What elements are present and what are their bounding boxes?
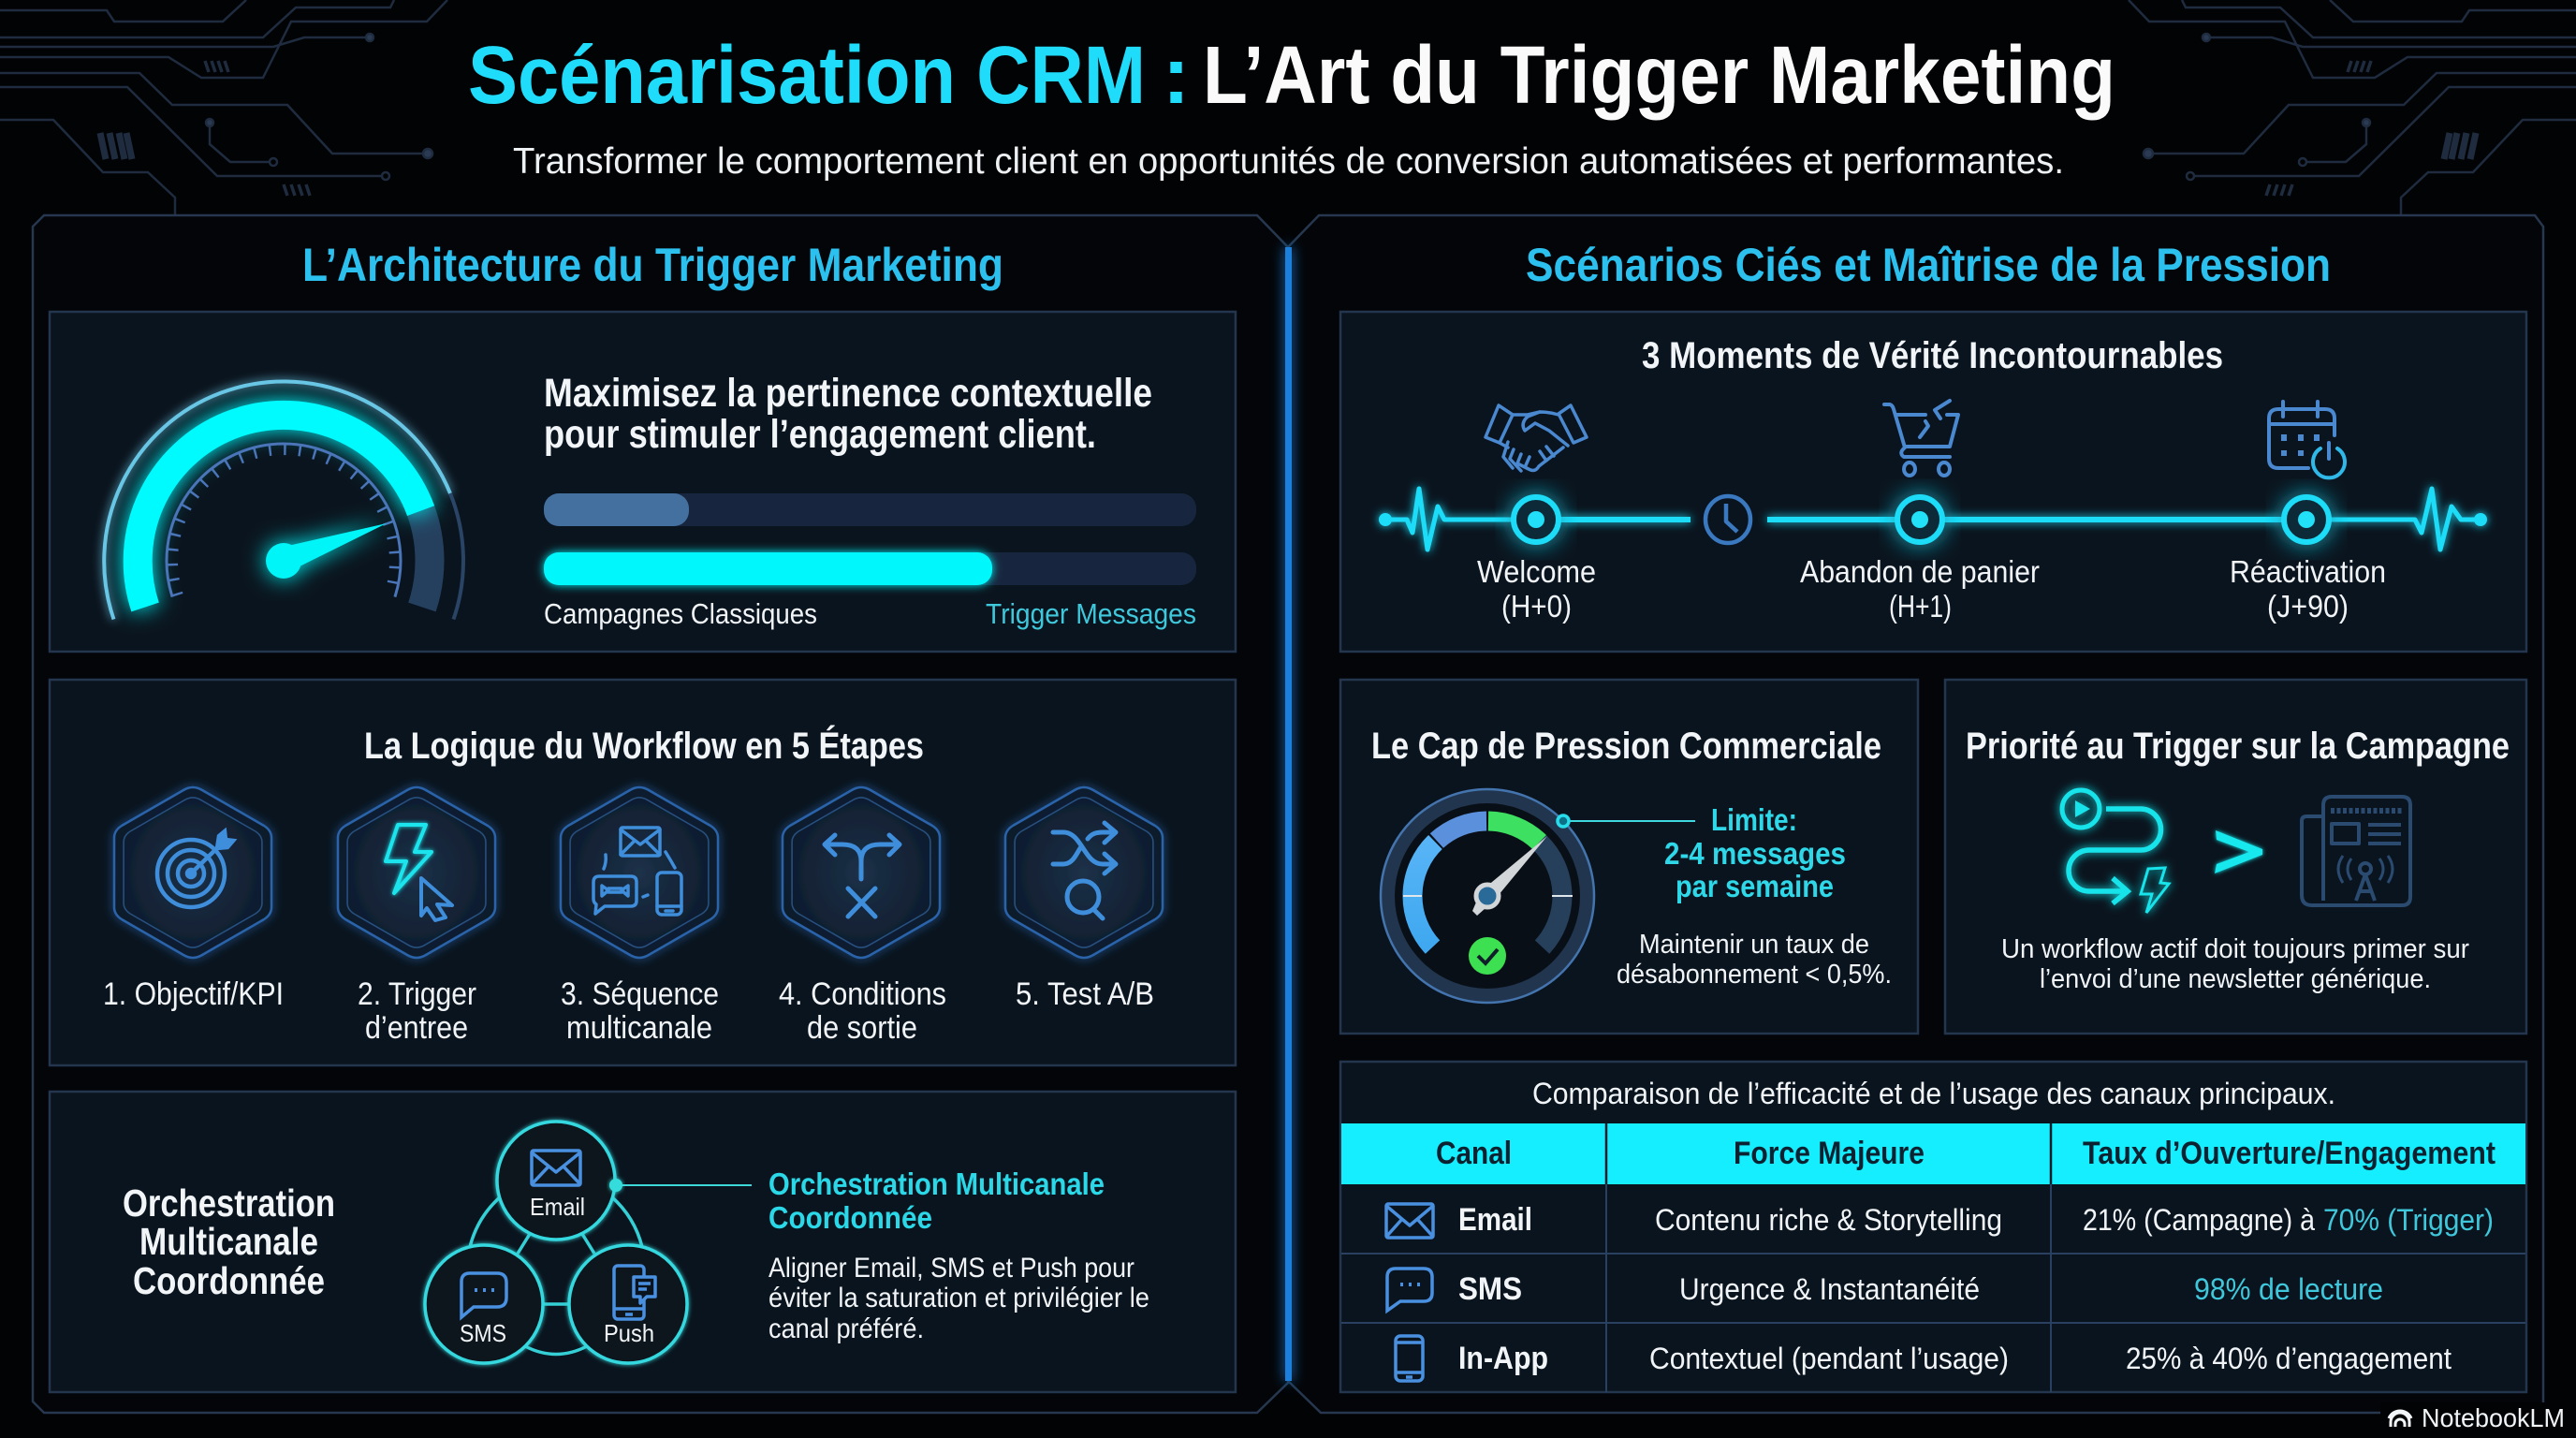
diagram: channels triad <box>425 1122 687 1363</box>
callout title: Orchestration Multicanale <box>768 1167 1105 1201</box>
arrow: greater than <box>2215 830 2262 873</box>
label: abandon de panier: Abandon de panier <box>1800 554 2040 589</box>
callout title: Coordonnée <box>768 1200 932 1235</box>
icon: envelope <box>1386 1204 1433 1238</box>
heading: left column: L’Architecture du Trigger Marketing <box>302 239 1003 291</box>
heading: right column: Scénarios Ciés et Maîtrise de la Pression <box>1526 239 2331 291</box>
label: reactivation: Réactivation <box>2230 554 2386 589</box>
bar label: trigger: Trigger Messages <box>986 597 1196 630</box>
chart: speed gauge <box>104 381 463 620</box>
bar: campagnes classiques <box>544 493 1196 526</box>
node: abandon <box>1897 497 1942 542</box>
title: L’Art du Trigger Marketing <box>1203 30 2115 121</box>
label: reactivation <box>2230 554 2386 624</box>
row: in-app: In-App <box>1458 1341 1548 1376</box>
callout title <box>768 1167 1105 1235</box>
icon: fork and cross <box>825 835 900 917</box>
step label 4: 4. Conditions <box>779 976 946 1012</box>
pressure note: désabonnement < 0,5%. <box>1617 960 1892 990</box>
panel: trigger priority <box>1945 680 2526 1034</box>
label: abandon de panier: (H+1) <box>1889 589 1952 624</box>
row: sms: Urgence & Instantanéité <box>1679 1272 1980 1306</box>
channel: email <box>497 1122 615 1240</box>
limit callout: 2-4 messages <box>1664 836 1846 871</box>
step 3: sequence <box>561 787 719 1046</box>
clock icon <box>1705 496 1750 543</box>
label: abandon de panier <box>1800 554 2040 624</box>
row: in-app <box>1396 1336 2452 1381</box>
priority note <box>2001 934 2469 994</box>
channel: push: Push <box>604 1319 654 1347</box>
row: sms <box>1387 1269 2383 1311</box>
channel: sms <box>425 1245 543 1363</box>
row: sms: 98% de lecture <box>2194 1272 2383 1306</box>
icon: workflow <box>2062 790 2169 913</box>
limit callout: Limite: <box>1711 802 1797 837</box>
connector line <box>609 1179 752 1192</box>
priority note: Un workflow actif doit toujours primer sur <box>2001 934 2469 964</box>
title: Scénarisation CRM <box>468 30 1146 121</box>
panel: relevance gauge and bars <box>50 312 1236 652</box>
orchestration title: Coordonnée <box>133 1259 325 1302</box>
circuit decoration right <box>2129 0 2576 215</box>
timeline <box>1379 489 2487 550</box>
panel: orchestration <box>50 1092 1236 1392</box>
bar label: classic: Campagnes Classiques <box>544 597 817 630</box>
row: email: 70% (Trigger) <box>2323 1203 2494 1237</box>
headline text: pour stimuler l’engagement client. <box>544 412 1096 457</box>
icon: target <box>157 831 233 907</box>
icon: channels <box>593 828 681 915</box>
pressure heading: Le Cap de Pression Commerciale <box>1371 726 1881 767</box>
pressure note: Maintenir un taux de <box>1639 930 1869 960</box>
step 2: trigger <box>338 787 495 1046</box>
label: welcome: (H+0) <box>1501 589 1572 624</box>
table header <box>1341 1123 2525 1184</box>
row: email: 21% (Campagne) à <box>2083 1203 2315 1237</box>
callout body: éviter la saturation et privilégier le <box>768 1283 1149 1313</box>
row: email <box>1386 1202 2494 1238</box>
icon: broken cart <box>1884 401 1958 476</box>
limit callout: par semaine <box>1676 869 1834 903</box>
subtitle: Transformer le comportement client en opportunités de conversion automatisées et performantes. <box>513 141 2064 182</box>
central divider bar <box>1285 247 1292 1381</box>
priority note: l’envoi d’une newsletter générique. <box>2040 964 2431 994</box>
notebooklm badge <box>2380 1402 2576 1438</box>
panel: right column frame <box>1288 215 2543 1413</box>
panel: 3 moments of truth <box>1340 312 2526 652</box>
orchestration title: Multicanale <box>139 1220 318 1263</box>
pressure note <box>1617 930 1892 990</box>
node: reactivation <box>2284 497 2329 542</box>
orchestration title: Orchestration <box>123 1181 335 1225</box>
panel: workflow in 5 steps <box>50 680 1236 1065</box>
title <box>468 30 2115 121</box>
step 4: exit conditions <box>779 787 946 1046</box>
title: : <box>1163 30 1190 121</box>
moments heading: 3 Moments de Vérité Incontournables <box>1642 335 2223 376</box>
icon: newspaper <box>2302 797 2410 905</box>
row: email: Contenu riche & Storytelling <box>1655 1203 2002 1237</box>
orchestration title <box>123 1181 335 1302</box>
icon: notebooklm logo <box>2389 1411 2411 1427</box>
icon: chat bubble <box>1387 1269 1432 1311</box>
channel: email: Email <box>530 1193 585 1221</box>
label: welcome: Welcome <box>1477 554 1596 589</box>
icon: calendar with power <box>2269 402 2345 477</box>
callout body: canal préféré. <box>768 1313 924 1344</box>
icon: shuffle and magnifier <box>1053 823 1116 918</box>
row: in-app: Contextuel (pendant l’usage) <box>1649 1342 2009 1375</box>
step label 4: de sortie <box>807 1010 917 1046</box>
headline text: Maximisez la pertinence contextuelle <box>544 371 1152 416</box>
panel: commercial pressure cap <box>1340 680 1918 1034</box>
step label 4 <box>779 976 946 1046</box>
panel: left column frame <box>33 215 1288 1413</box>
node: welcome <box>1514 497 1559 542</box>
table header: Canal <box>1436 1136 1512 1171</box>
channel: push <box>569 1245 687 1363</box>
step label 3: 3. Séquence <box>561 976 719 1012</box>
step 1: objectif <box>103 787 284 1012</box>
step 5: test A/B <box>1005 787 1163 1012</box>
channel: sms: SMS <box>460 1319 506 1347</box>
callout body <box>768 1253 1149 1344</box>
step label 3 <box>561 976 719 1046</box>
workflow heading: La Logique du Workflow en 5 Étapes <box>364 725 924 767</box>
step label 5: 5. Test A/B <box>1016 976 1154 1012</box>
notebooklm badge: NotebookLM <box>2422 1403 2565 1432</box>
icon: handshake <box>1486 405 1587 471</box>
label: welcome <box>1477 554 1596 624</box>
step label 2 <box>358 976 476 1046</box>
step label 3: multicanale <box>566 1010 712 1046</box>
limit callout <box>1664 802 1846 903</box>
circuit decoration left <box>0 0 447 215</box>
bar: trigger messages <box>544 552 1196 585</box>
step label 1: 1. Objectif/KPI <box>103 976 284 1012</box>
table caption: Comparaison de l’efficacité et de l’usage des canaux principaux. <box>1532 1077 2335 1110</box>
table header: Force Majeure <box>1734 1136 1925 1171</box>
callout body: Aligner Email, SMS et Push pour <box>768 1253 1134 1284</box>
icon: bolt and cursor <box>386 825 452 920</box>
row: sms: SMS <box>1458 1271 1522 1307</box>
table header: Taux d’Ouverture/Engagement <box>2083 1136 2496 1171</box>
step label 2: 2. Trigger <box>358 976 476 1012</box>
headline text <box>544 371 1152 457</box>
row: email: Email <box>1458 1202 1532 1238</box>
step label 2: d’entree <box>365 1010 468 1046</box>
icon: phone <box>1396 1336 1423 1381</box>
row: in-app: 25% à 40% d’engagement <box>2126 1342 2452 1375</box>
label: reactivation: (J+90) <box>2267 589 2349 624</box>
panel: channel comparison table <box>1340 1062 2526 1392</box>
chart: pressure gauge <box>1381 789 1695 1003</box>
